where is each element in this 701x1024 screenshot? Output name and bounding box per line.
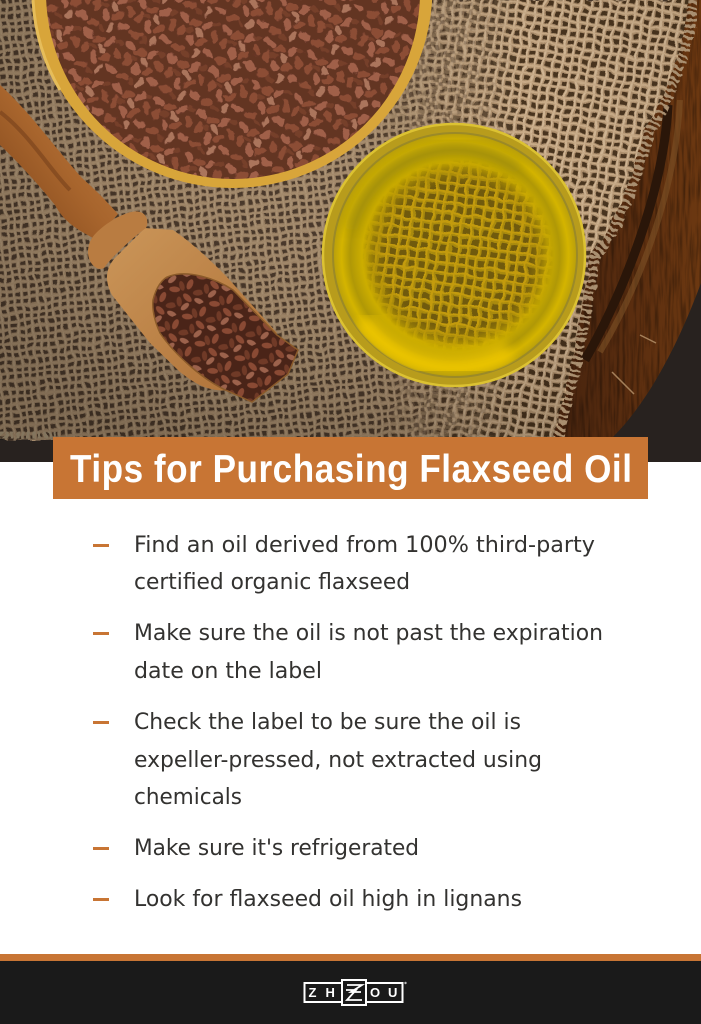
logo: U	[388, 985, 397, 1000]
tip 1	[93, 533, 595, 595]
wooden board	[554, 0, 701, 437]
footer	[0, 954, 701, 1024]
tip 2	[93, 621, 603, 684]
logo: O	[370, 985, 380, 1000]
logo: H	[326, 985, 335, 1000]
icon: glass bowl of flaxseed oil	[322, 123, 586, 387]
tip 1: certified organic flaxseed	[134, 570, 410, 595]
burlap cloth	[0, 0, 690, 440]
title: Tips for Purchasing Flaxseed Oil	[70, 446, 632, 490]
tip 3	[93, 710, 542, 810]
logo	[304, 980, 407, 1005]
title banner	[53, 437, 648, 499]
tip 1: Find an oil derived from 100% third-party	[134, 533, 595, 558]
tip 3: Check the label to be sure the oil is	[134, 710, 521, 735]
icon: bowl of flaxseed	[30, 0, 440, 190]
list of tips	[93, 533, 603, 912]
tip 3: chemicals	[134, 785, 242, 810]
flaxseed in scoop	[153, 274, 298, 402]
tip 2: date on the label	[134, 659, 322, 684]
logo: Z	[308, 985, 316, 1000]
tip 5: Look for flaxseed oil high in lignans	[134, 887, 522, 912]
tip 4: Make sure it's refrigerated	[134, 836, 419, 861]
photo: flaxseed bowl, scoop and oil on burlap	[0, 0, 701, 462]
dark wood table	[0, 283, 701, 462]
tip 3: expeller-pressed, not extracted using	[134, 748, 542, 773]
icon: wooden scoop	[88, 211, 277, 390]
icon: wooden scoop handle	[0, 85, 118, 240]
tip 2: Make sure the oil is not past the expiration	[134, 621, 603, 646]
